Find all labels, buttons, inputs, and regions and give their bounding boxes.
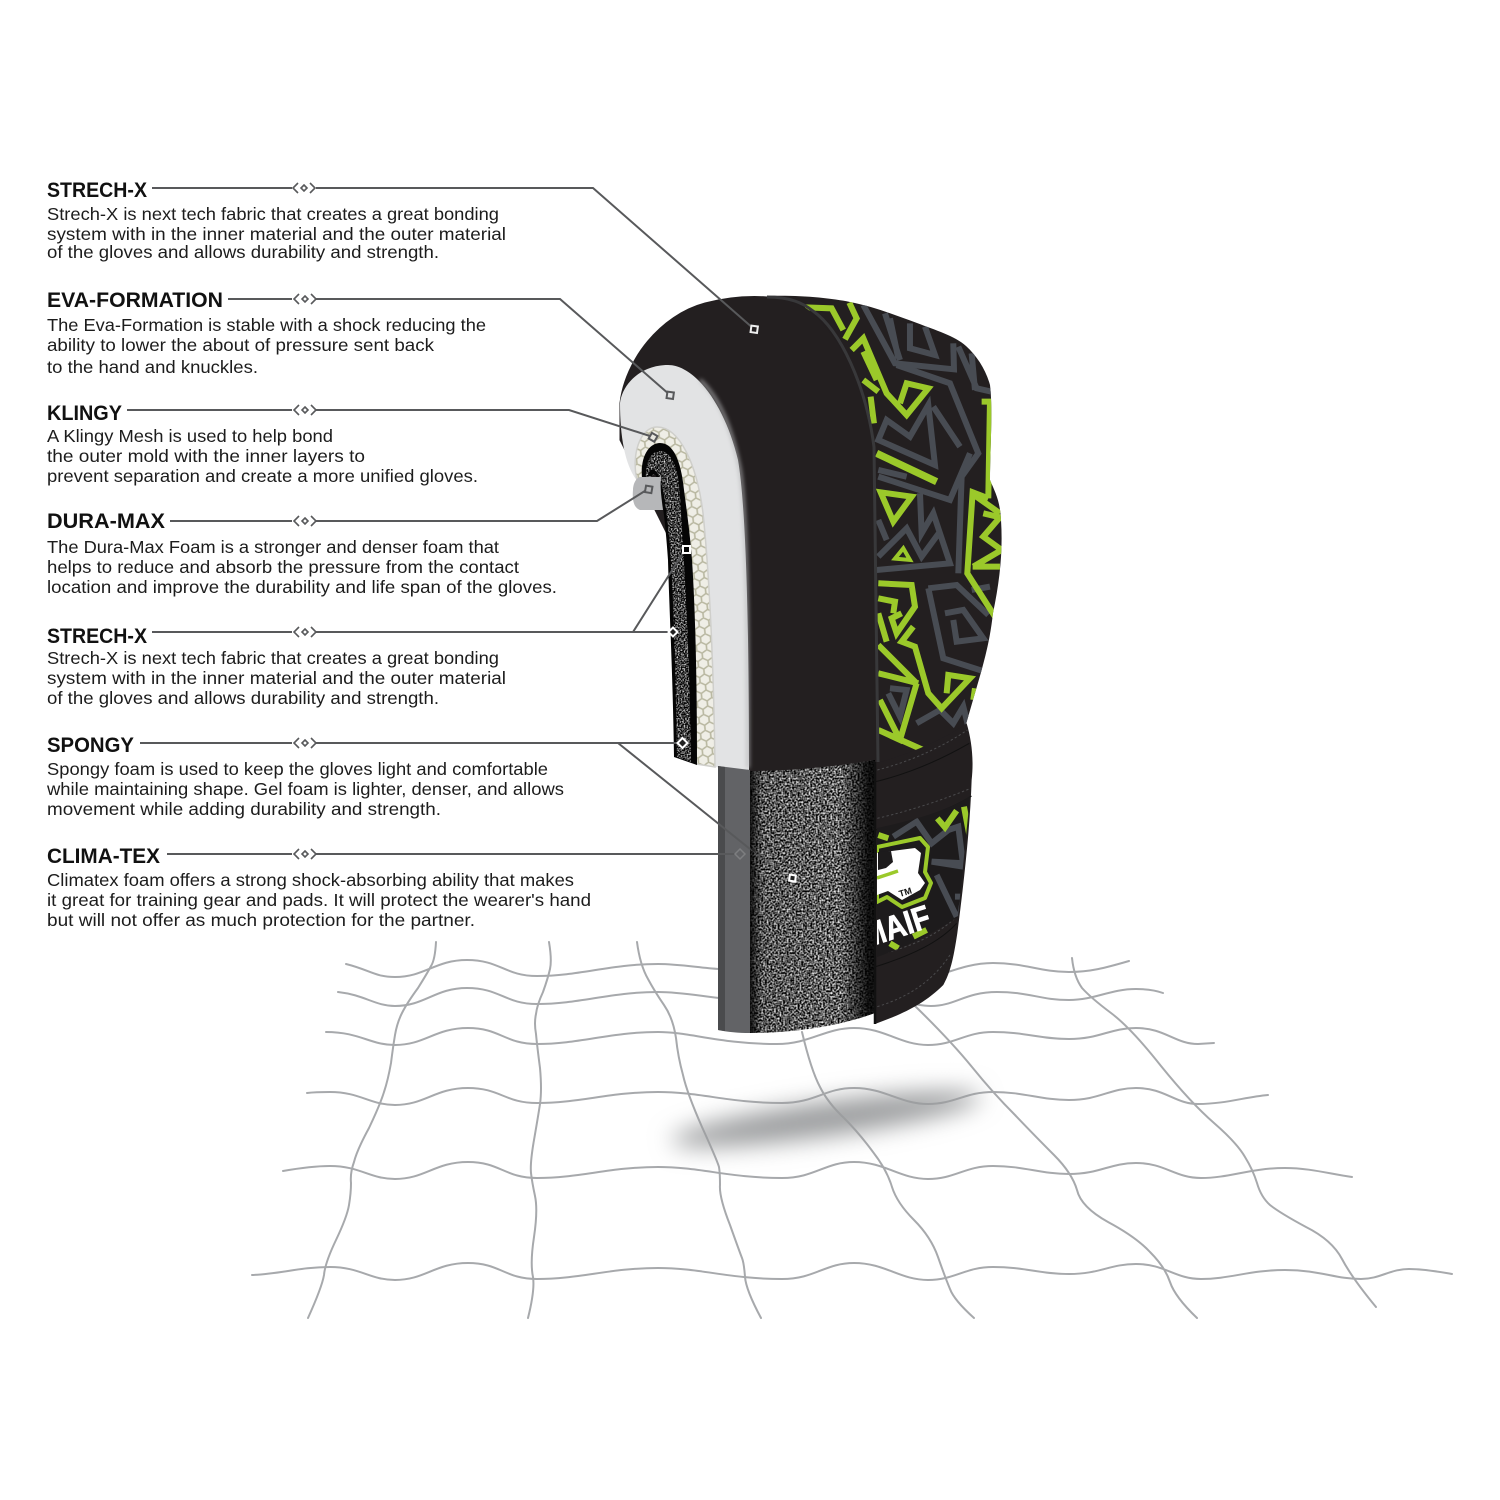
seam line [767,297,878,762]
description: Strech-X is next tech fabric that creates a great bonding [47,204,499,224]
description: A Klingy Mesh is used to help bond [47,426,333,446]
description: but will not offer as much protection for the partner. [47,910,475,930]
floor net grid [252,942,1452,1318]
description: movement while adding durability and strength. [47,799,441,819]
heading: STRECH-X [47,179,147,202]
wrist strap with logo [874,723,973,1024]
leader line [152,180,758,333]
outer black layer: Strech-X [620,296,878,771]
description: system with in the inner material and the outer material [47,668,506,688]
callout: Spongy [46,734,796,881]
leader line [228,291,674,399]
description [47,315,486,377]
black inner shell [642,443,697,765]
boxing glove cross-section [620,296,1002,1033]
callout: Eva-Formation [47,289,674,399]
description: of the gloves and allows durability and strength. [47,242,439,262]
logo R mark [877,838,931,907]
callout: Dura-Max [47,486,652,597]
patterned outer shell [767,296,1002,790]
leader line [170,486,652,529]
description [47,204,506,262]
description: while maintaining shape. Gel foam is lighter, denser, and allows [46,779,564,799]
inner speckled foam: Spongy [646,451,691,762]
description: ability to lower the about of pressure sent back [47,335,434,355]
heading: EVA-FORMATION [47,289,223,312]
description: The Dura-Max Foam is a stronger and denser foam that [47,537,499,557]
wrist speckled foam [750,760,875,1033]
description: helps to reduce and absorb the pressure from the contact [47,557,519,577]
glove floor shadow [669,1080,983,1158]
description: The Eva-Formation is stable with a shock reducing the [47,315,486,335]
description: prevent separation and create a more unified gloves. [47,466,478,486]
heading: CLIMA-TEX [47,845,160,868]
description [47,537,557,597]
leader line [127,402,658,442]
heading: KLINGY [47,402,122,425]
description: to the hand and knuckles. [47,357,258,377]
description [47,870,591,930]
description: Spongy foam is used to keep the gloves light and comfortable [47,759,548,779]
logo R mark: TM [898,886,913,899]
callout: Strech-X lower [47,546,690,708]
callout: Clima-Tex [47,845,745,930]
description [47,648,506,708]
wrist gel strip: Clima-Tex [718,766,750,1033]
leader line [152,546,690,640]
strap logo patch [877,797,970,956]
callout: Strech-X top [47,179,758,333]
leader line [140,735,796,881]
logo wordmark: MAIF [857,898,935,955]
leader line [167,846,745,862]
description [46,759,564,819]
heading: DURA-MAX [47,510,165,533]
description: system with in the inner material and the outer material [47,224,506,244]
white layer: Eva-Formation foam [620,365,749,770]
heading: STRECH-X [47,625,147,648]
mesh layer: Klingy [635,427,715,767]
description [47,426,478,486]
callout: Klingy [47,402,658,486]
description: the outer mold with the inner layers to [47,446,365,466]
description: Climatex foam offers a strong shock-absorbing ability that makes [47,870,574,890]
description: Strech-X is next tech fabric that creates a great bonding [47,648,499,668]
description: location and improve the durability and life span of the gloves. [47,577,557,597]
description: it great for training gear and pads. It will protect the wearer's hand [47,890,591,910]
heading: SPONGY [47,734,134,757]
description: of the gloves and allows durability and strength. [47,688,439,708]
grey foam cylinder: Dura-Max [633,477,663,510]
